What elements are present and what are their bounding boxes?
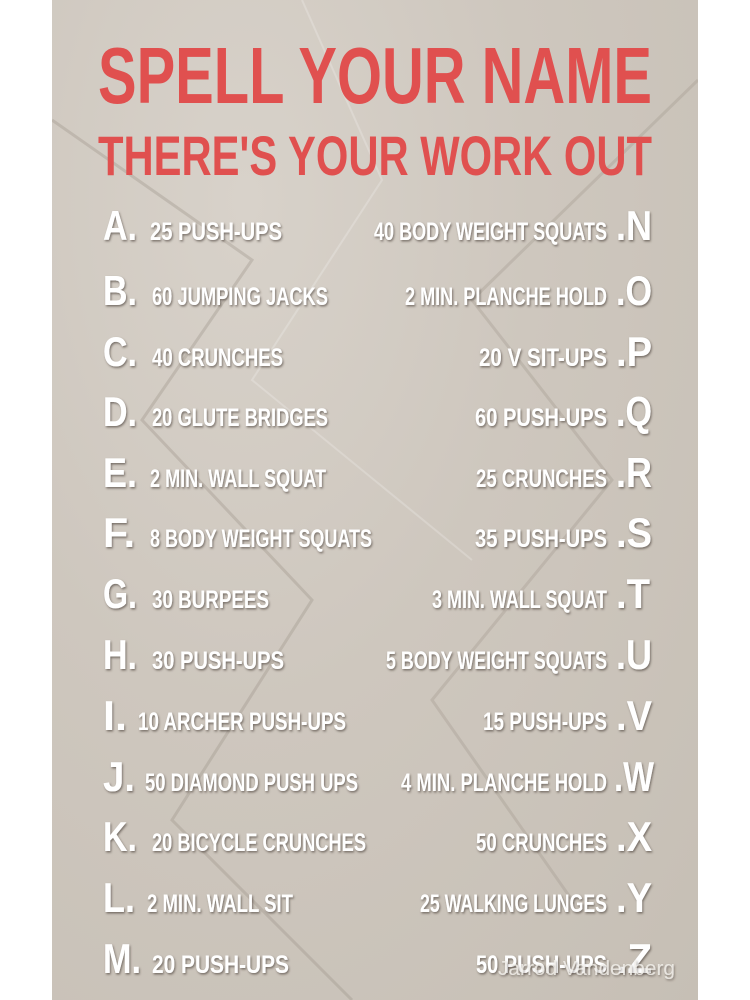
title xyxy=(98,31,652,187)
right column entries: .X xyxy=(616,813,652,860)
right column entries: .Z xyxy=(616,935,652,982)
right column entries: .U xyxy=(616,631,652,678)
right column entries: .Q xyxy=(616,388,652,435)
left column entries: L. xyxy=(103,874,135,921)
left column entries: K. xyxy=(103,813,137,860)
right column entries: 5 BODY WEIGHT SQUATS xyxy=(386,647,607,675)
right column entries: .V xyxy=(616,692,652,739)
left column entries: H. xyxy=(103,631,137,678)
left column entries: 8 BODY WEIGHT SQUATS xyxy=(150,525,372,553)
left column entries: 2 MIN. WALL SQUAT xyxy=(150,465,326,493)
left column entries: D. xyxy=(103,388,137,435)
left column entries xyxy=(103,202,372,982)
right column entries: .P xyxy=(616,328,652,375)
right column entries: 25 CRUNCHES xyxy=(476,465,607,493)
right column entries: .O xyxy=(616,267,652,314)
right column entries: 15 PUSH-UPS xyxy=(483,708,607,736)
left column entries: F. xyxy=(103,509,135,556)
left column entries: M. xyxy=(103,935,141,982)
right column entries: 25 WALKING LUNGES xyxy=(420,890,607,918)
left column entries: 20 BICYCLE CRUNCHES xyxy=(152,829,366,857)
right column entries xyxy=(374,202,654,982)
right column entries: .S xyxy=(616,509,652,556)
left column entries: A. xyxy=(103,202,137,249)
left column entries: J. xyxy=(103,753,135,800)
right column entries: .W xyxy=(614,753,654,800)
left column entries: 40 CRUNCHES xyxy=(152,344,283,372)
left column entries: G. xyxy=(103,570,137,617)
left column entries: E. xyxy=(103,449,137,496)
left column entries: 20 GLUTE BRIDGES xyxy=(152,404,328,432)
left column entries: 2 MIN. WALL SIT xyxy=(147,890,293,918)
right column entries: 2 MIN. PLANCHE HOLD xyxy=(405,283,607,311)
right column entries: 50 PUSH-UPS xyxy=(476,951,607,979)
left column entries: 50 DIAMOND PUSH UPS xyxy=(145,769,358,797)
left column entries: I. xyxy=(103,692,127,739)
right column entries: 40 BODY WEIGHT SQUATS xyxy=(374,218,607,246)
right column entries: 60 PUSH-UPS xyxy=(475,404,607,432)
right column entries: 50 CRUNCHES xyxy=(476,829,607,857)
left column entries: 30 PUSH-UPS xyxy=(152,647,284,675)
right column entries: .Y xyxy=(616,874,652,921)
right column entries: 3 MIN. WALL SQUAT xyxy=(432,586,607,614)
left column entries: B. xyxy=(103,267,137,314)
right column entries: 35 PUSH-UPS xyxy=(475,525,607,553)
left column entries: 20 PUSH-UPS xyxy=(152,951,289,979)
right column entries: 20 V SIT-UPS xyxy=(479,344,607,372)
left column entries: 60 JUMPING JACKS xyxy=(152,283,328,311)
right column entries: .N xyxy=(616,202,652,249)
left column entries: 30 BURPEES xyxy=(152,586,269,614)
right column entries: .R xyxy=(616,449,652,496)
left column entries: 10 ARCHER PUSH-UPS xyxy=(138,708,346,736)
right column entries: 4 MIN. PLANCHE HOLD xyxy=(401,769,607,797)
right column entries: .T xyxy=(616,570,650,617)
watermark: Jarrod Vandenberg xyxy=(498,958,675,980)
left column entries: 25 PUSH-UPS xyxy=(150,218,282,246)
left column entries: C. xyxy=(103,328,137,375)
